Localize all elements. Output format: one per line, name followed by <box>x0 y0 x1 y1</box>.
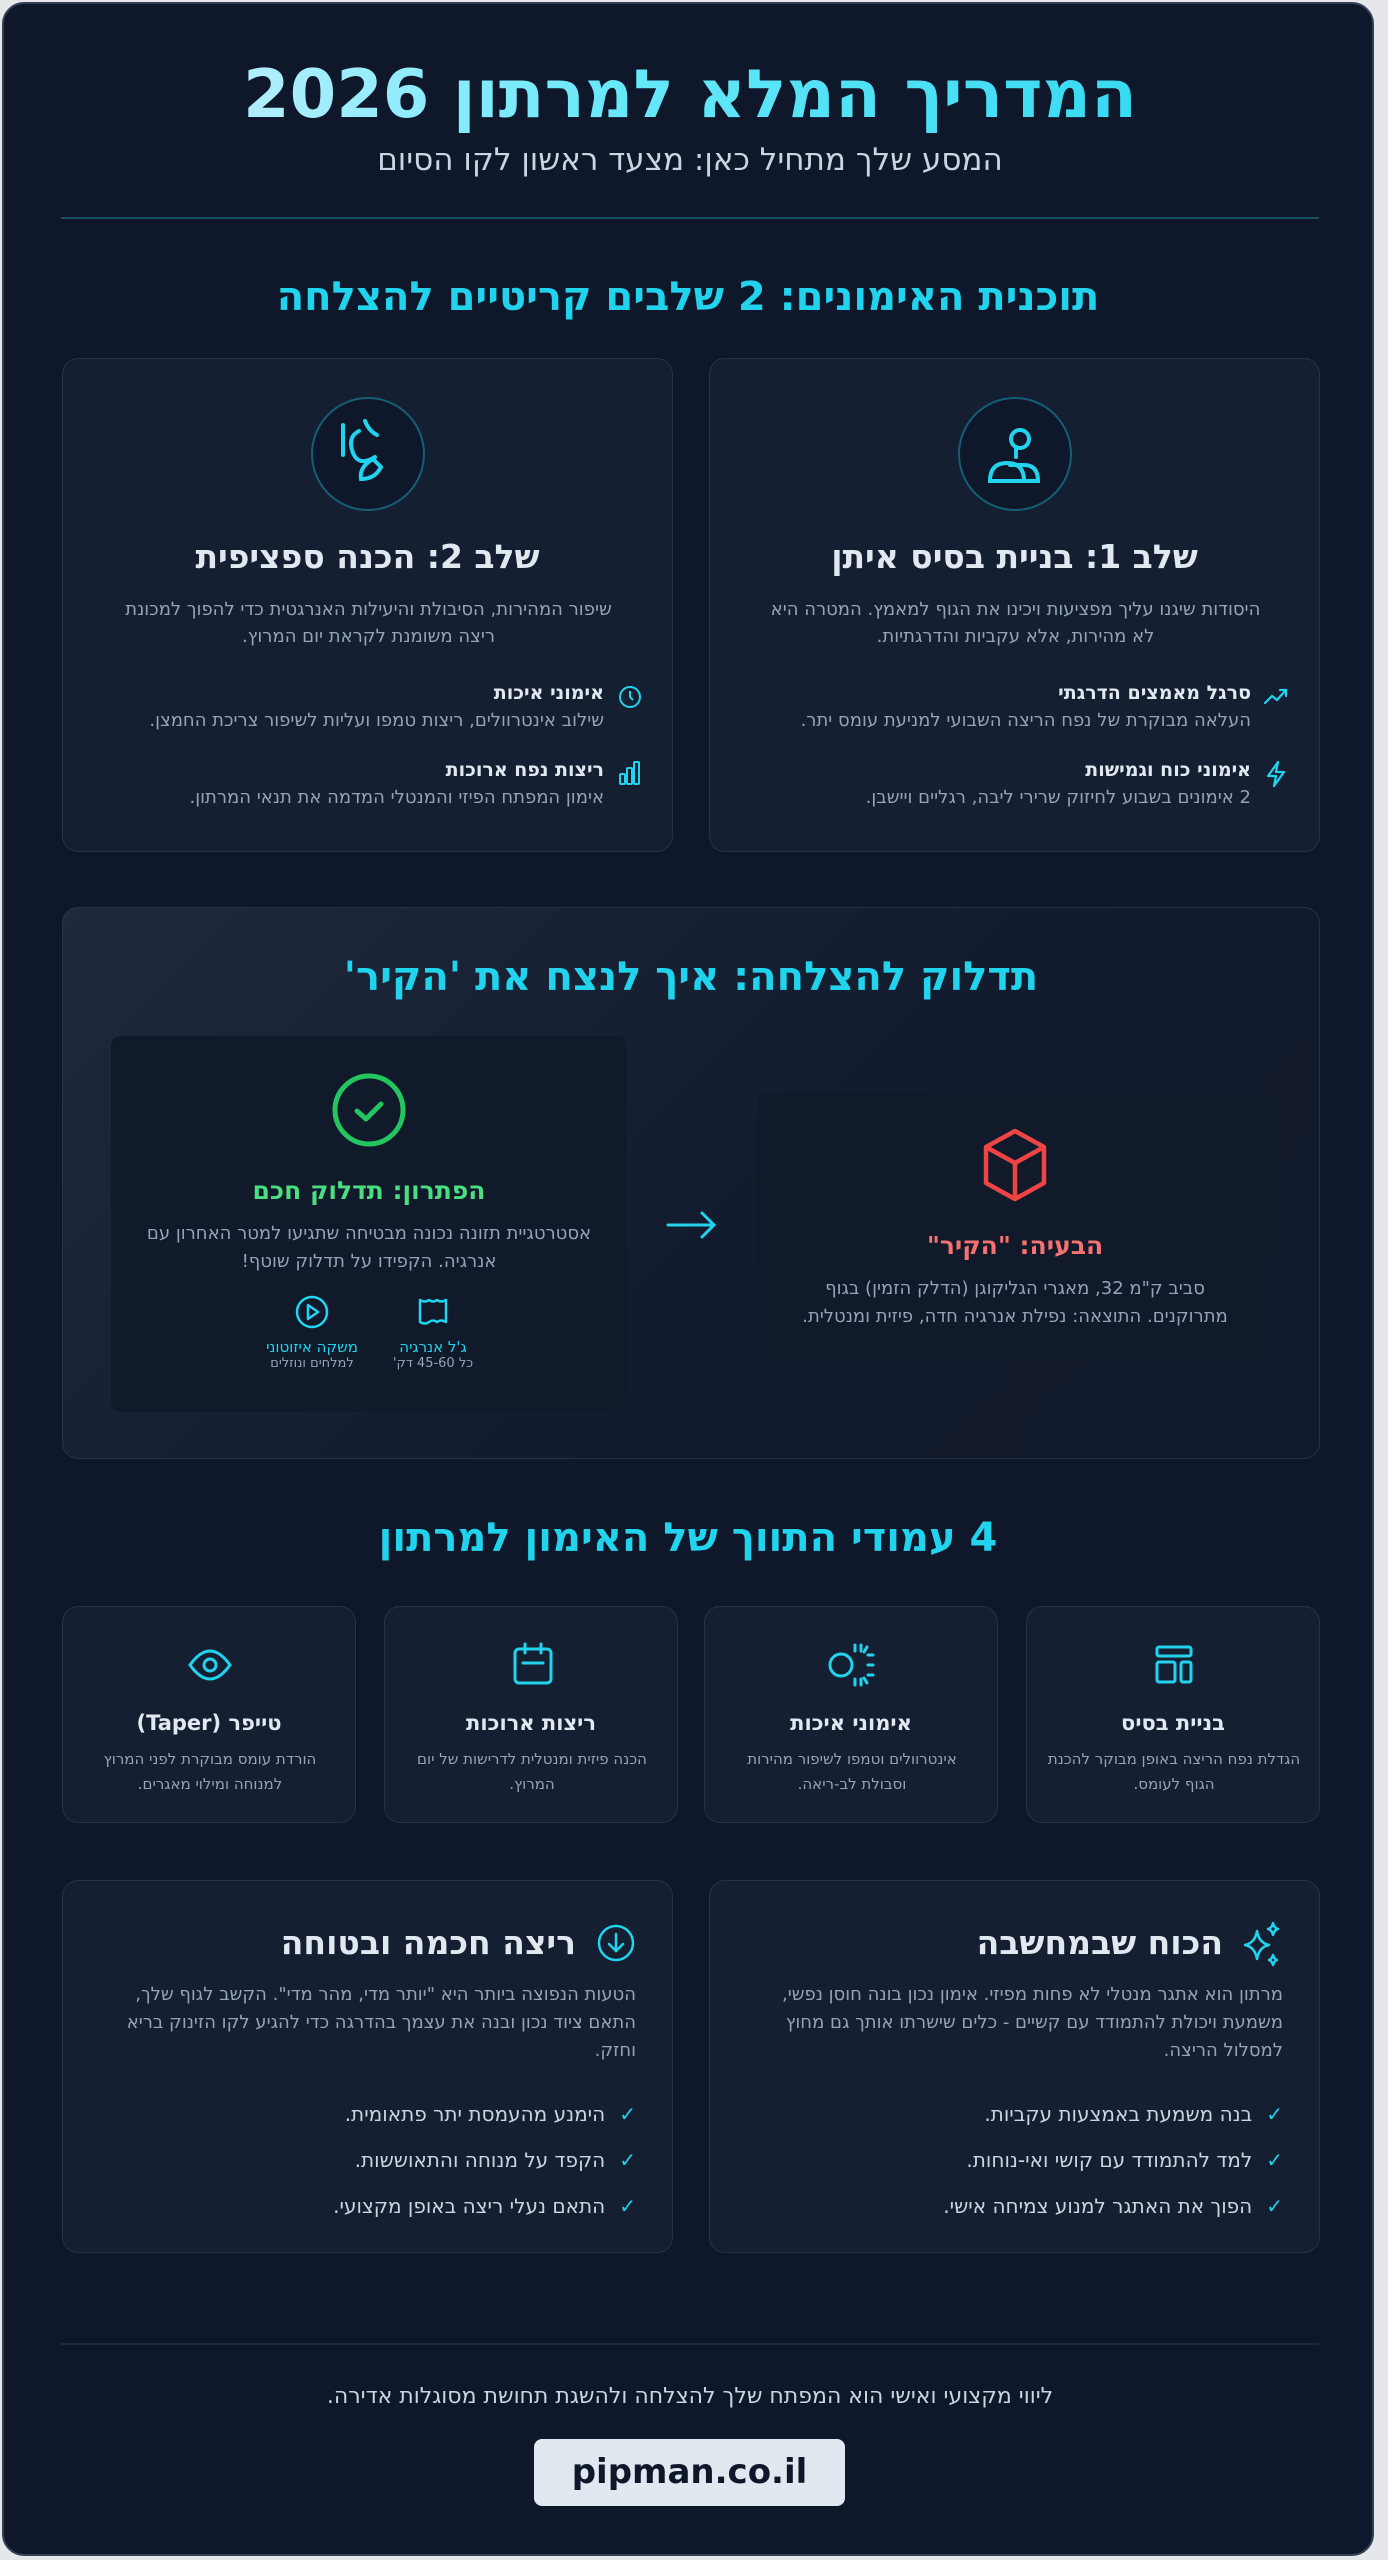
checklist: ✓למד להתמודד עם קושי ואי-נוחות. <box>966 2148 1283 2172</box>
text: שיפור המהירות, הסיבולת והיעילות האנרגטית כדי להפוך למכונת ריצה משומנת לקראת יום המרוץ. <box>125 599 612 647</box>
item: strength: 2 אימונים בשבוע לחיזוק שרירי ליבה, רגליים ויישבן. <box>866 787 1251 808</box>
gel: כל 45-60 דק' <box>393 1356 473 1371</box>
item: load: העלאה מבוקרת של נפח הריצה השבועי למניעת עומס יתר. <box>801 710 1251 731</box>
solution box <box>111 1036 627 1412</box>
problem box <box>757 1093 1273 1358</box>
title: המדריך המלא למרתון 2026 <box>243 55 1137 133</box>
pillar: taper: טייפר (Taper) <box>136 1711 282 1735</box>
pillar: base: בניית בסיס <box>1121 1711 1225 1735</box>
drink <box>266 1296 358 1371</box>
text: מרתון הוא אתגר מנטלי לא פחות מפיזי. אימון נכון בונה חוסן נפשי, משמעת ויכולת להתמודד עם קשיים - כלים שישרתו אותך גם מחוץ למסלול הריצה. <box>782 1984 1283 2061</box>
item: load: סרגל מאמצים הדרגתי <box>1058 682 1251 704</box>
text: הטעות הנפוצה ביותר היא "יותר מדי, מהר מדי". הקשב לגוף שלך, התאם ציוד נכון ובנה את עצמך בהדרגה כדי להגיע לקו הזינוק בריא וחזק. <box>127 1984 636 2061</box>
button: website <box>534 2439 845 2506</box>
heading with icon: הכוח שבמחשבה <box>977 1923 1223 1962</box>
pillar: base <box>1026 1606 1320 1823</box>
heading with icon: ריצה חכמה ובטוחה <box>281 1923 576 1962</box>
gel: ג'ל אנרגיה <box>399 1338 467 1356</box>
item: long runs: אימון המפתח הפיזי והמנטלי המדמה את תנאי המרתון. <box>189 787 604 808</box>
pillar: long runs: הכנה פיזית ומנטלית לדרישות של יום המרוץ. <box>417 1750 647 1793</box>
heading: שלב 1: בניית בסיס איתן <box>831 537 1198 576</box>
panel: fueling <box>62 907 1320 1459</box>
checklist <box>333 2102 636 2218</box>
pillar: quality: אינטרוולים וטמפו לשיפור מהירות וסבולת לב-ריאה. <box>747 1750 957 1793</box>
icon: person <box>958 397 1072 511</box>
checklist: ✓הפוך את האתגר למנוע צמיחה אישי. <box>943 2194 1283 2218</box>
pillar: quality <box>704 1606 998 1823</box>
drink: משקה איזוטוני <box>266 1338 358 1356</box>
item: long runs: ריצות נפח ארוכות <box>446 759 604 781</box>
section heading: training plan: תוכנית האימונים: 2 שלבים קריטיים להצלחה <box>277 274 1099 320</box>
title: הבעיה: "הקיר" <box>927 1231 1103 1260</box>
pillar: long runs <box>384 1606 678 1823</box>
pillar: base: הגדלת נפח הריצה באופן מבוקר להכנת הגוף לעומס. <box>1048 1750 1300 1793</box>
subtitle: המסע שלך מתחיל כאן: מצעד ראשון לקו הסיום <box>377 142 1003 178</box>
section heading: pillars: 4 עמודי התווך של האימון למרתון <box>379 1515 997 1561</box>
title <box>4 54 1376 134</box>
heading: שלב 2: הכנה ספציפית <box>195 537 540 576</box>
pillar: quality: אימוני איכות <box>790 1711 912 1735</box>
icon: runner <box>311 397 425 511</box>
item: strength: אימוני כוח וגמישות <box>1085 759 1251 781</box>
panel: phase 1 <box>709 358 1320 852</box>
checklist: ✓בנה משמעת באמצעות עקביות. <box>984 2102 1283 2126</box>
icon: cube <box>984 1128 1046 1202</box>
item: interval: שילוב אינטרוולים, ריצות טמפו ועליות לשיפור צריכת החמצן. <box>149 710 604 731</box>
button: website: pipman.co.il <box>572 2452 807 2492</box>
checklist: ✓התאם נעלי ריצה באופן מקצועי. <box>333 2194 636 2218</box>
pillar: taper: הורדת עומס מבוקרת לפני המרוץ למנוחה ומילוי מאגרים. <box>104 1750 316 1793</box>
pillar: taper <box>62 1606 356 1823</box>
footer text: ליווי מקצועי ואישי הוא המפתח שלך להצלחה ולהשגת תחושת מסוגלות אדירה. <box>327 2384 1053 2409</box>
item: load <box>801 682 1288 731</box>
panel: safe running <box>62 1880 673 2253</box>
gel <box>393 1298 473 1371</box>
checklist: ✓הקפד על מנוחה והתאוששות. <box>355 2148 636 2172</box>
drink: למלחים ונוזלים <box>270 1356 354 1371</box>
arrow <box>666 1211 716 1239</box>
text: אסטרטגיית תזונה נכונה מבטיחה שתגיעו למטר האחרון עם אנרגיה. הקפידו על תדלוק שוטף! <box>147 1223 591 1272</box>
item: long runs <box>189 759 640 808</box>
icon: check <box>332 1074 406 1146</box>
panel: mental power <box>709 1880 1320 2253</box>
checklist <box>943 2102 1283 2218</box>
item: interval: אימוני איכות <box>494 682 604 704</box>
title: הפתרון: תדלוק חכם <box>253 1176 485 1205</box>
panel: phase 2 <box>62 358 673 852</box>
text: סביב ק"מ 32, מאגרי הגליקוגן (הדלק הזמין) בגוף מתרוקנים. התוצאה: נפילת אנרגיה חדה, פיזית ומנטלית. <box>802 1278 1228 1327</box>
item: strength <box>866 759 1286 808</box>
checklist: ✓הימנע מהעמסת יתר פתאומית. <box>345 2102 636 2126</box>
heading: תדלוק להצלחה: איך לנצח את 'הקיר' <box>344 954 1038 1000</box>
item: interval <box>149 682 641 731</box>
text: היסודות שיגנו עליך מפציעות ויכינו את הגוף למאמץ. המטרה היא לא מהירות, אלא עקביות והדרגתיות. <box>771 599 1260 647</box>
pillar: long runs: ריצות ארוכות <box>466 1711 596 1735</box>
